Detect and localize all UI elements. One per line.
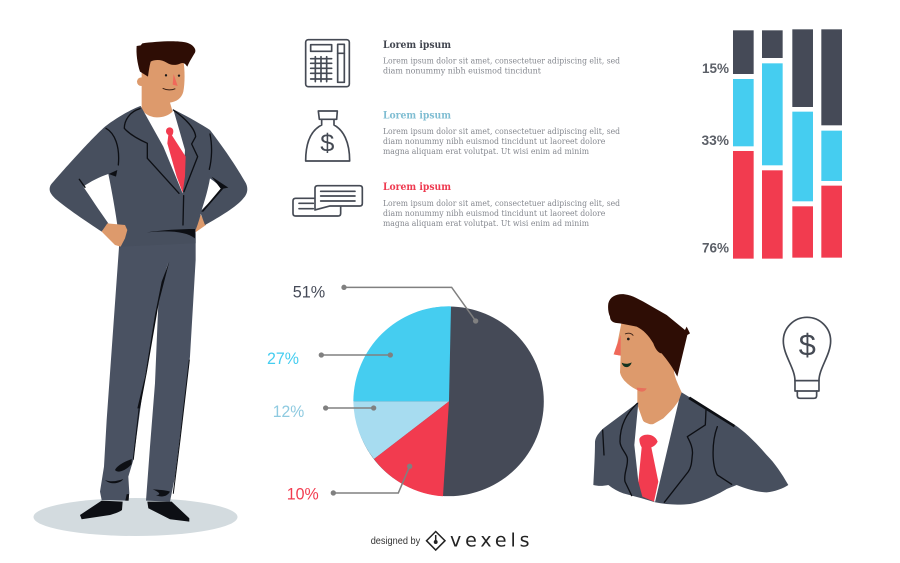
face details xyxy=(173,74,178,86)
heading and text: block three: diam nonummy nibh euismod tincidunt ut laoreet dolore xyxy=(383,209,605,219)
bar labels: 15% xyxy=(702,61,729,76)
heading and text: block one: Lorem ipsum xyxy=(383,39,451,51)
icon: light bulb with dollar xyxy=(783,317,831,398)
pie labels: 27% xyxy=(267,349,299,368)
bars xyxy=(733,29,842,259)
heading and text: block two: Lorem ipsum dolor sit amet, consectetuer adipiscing elit, sed xyxy=(383,127,620,137)
heading and text: block one: diam nonummy nibh euismod tincidunt xyxy=(383,66,541,76)
illustration: standing businessman xyxy=(50,41,247,522)
illustration: businessman bust in profile xyxy=(593,294,788,505)
jacket creases xyxy=(124,109,198,193)
hair xyxy=(608,294,690,377)
pie labels xyxy=(267,282,325,503)
jacket creases xyxy=(603,403,732,502)
ear xyxy=(137,77,146,86)
neck and face xyxy=(142,57,185,117)
pie slices xyxy=(319,285,544,496)
bar labels: 33% xyxy=(702,133,729,148)
icon: light bulb with dollar: $ xyxy=(799,329,816,363)
bar labels: 76% xyxy=(702,241,729,256)
heading and text: block three xyxy=(383,181,620,229)
shirt xyxy=(634,398,681,502)
bar labels xyxy=(702,61,729,256)
icon: money bag xyxy=(306,111,350,161)
trousers and shoes xyxy=(80,233,196,522)
heading and text: block two: diam nonummy nibh euismod tincidunt ut laoreet dolore xyxy=(383,137,605,147)
heading and text: block one xyxy=(383,39,620,76)
ground shadow xyxy=(34,498,238,536)
hair xyxy=(136,41,195,77)
heading and text: block three: Lorem ipsum dolor sit amet, consectetuer adipiscing elit, sed xyxy=(383,199,620,209)
heading and text: block two: Lorem ipsum xyxy=(383,110,451,122)
heading and text: block three: magna aliquam erat volutpat. Ut wisi enim ad minim xyxy=(383,219,589,229)
right hand xyxy=(193,210,206,233)
upper body xyxy=(50,41,247,247)
pie chart xyxy=(267,282,544,503)
stacked bar chart xyxy=(702,29,842,259)
heading and text: block two: magna aliquam erat volutpat. Ut wisi enim ad minim xyxy=(383,147,589,157)
tie xyxy=(166,127,186,193)
icon: money bag: $ xyxy=(320,129,334,157)
jacket xyxy=(50,106,247,247)
face details xyxy=(614,335,621,356)
jacket xyxy=(593,392,788,505)
icon: chat bubbles xyxy=(293,186,362,216)
left hand xyxy=(102,223,127,247)
credit: designed by vexels: vexels xyxy=(450,530,530,552)
leader lines xyxy=(321,287,476,493)
face and neck xyxy=(614,322,682,425)
pie labels: 10% xyxy=(287,484,319,503)
heading and text: block one: Lorem ipsum dolor sit amet, consectetuer adipiscing elit, sed xyxy=(383,56,620,66)
icon: vexels diamond xyxy=(426,532,445,550)
heading and text: block three: Lorem ipsum xyxy=(383,181,451,193)
heading and text: block two xyxy=(383,110,620,157)
ear xyxy=(662,348,674,363)
pie labels: 51% xyxy=(293,282,325,301)
shirt xyxy=(141,109,187,193)
credit: designed by vexels xyxy=(371,530,530,552)
icon: ledger calculator xyxy=(306,40,349,87)
pie labels: 12% xyxy=(273,402,304,421)
credit: designed by vexels: designed by xyxy=(371,536,420,547)
tie xyxy=(638,435,658,502)
